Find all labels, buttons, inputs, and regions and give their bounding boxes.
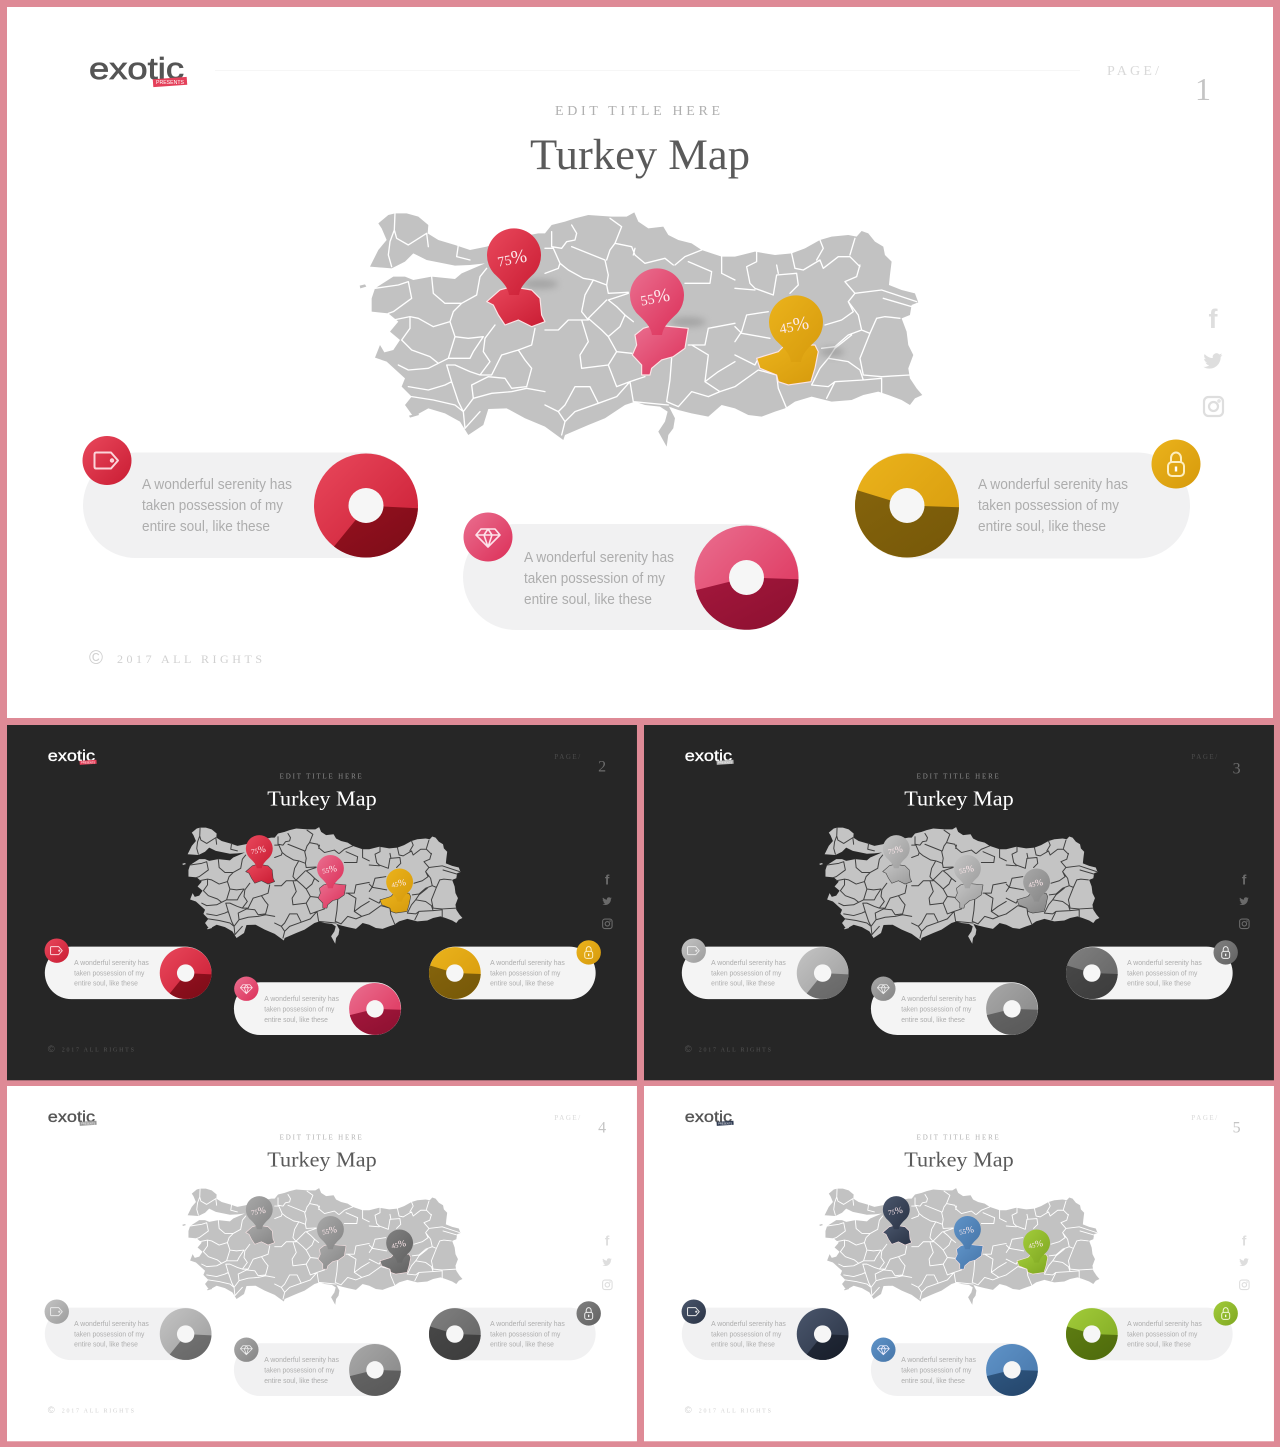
card text: A wonderful serenity has <box>74 958 149 967</box>
card text: taken possession of my <box>711 1329 782 1338</box>
province and pin: 55%: 55% <box>321 864 338 877</box>
card: middle <box>234 1338 401 1396</box>
card: right <box>1066 1301 1238 1360</box>
social icons: f <box>1242 1234 1247 1249</box>
card text: taken possession of my <box>978 497 1119 514</box>
subtitle: EDIT TITLE HERE <box>280 1134 363 1142</box>
card: middle <box>234 977 401 1035</box>
card text: taken possession of my <box>711 968 782 977</box>
card text: taken possession of my <box>901 1366 972 1375</box>
card text: A wonderful serenity has <box>490 958 565 967</box>
donut chart <box>314 454 418 558</box>
page number: 4 <box>598 1119 606 1136</box>
province and pin: 75% <box>487 228 558 327</box>
icon: tag <box>45 938 69 963</box>
card: left <box>45 1299 212 1360</box>
card: left <box>682 938 849 999</box>
icon: tag <box>82 436 132 485</box>
icon: tag <box>682 1299 706 1324</box>
card text <box>264 1355 339 1385</box>
card text: entire soul, like these <box>1127 1340 1191 1349</box>
donut chart <box>349 983 401 1035</box>
title: Turkey Map <box>267 1148 377 1172</box>
logo: PRESENTS <box>81 1122 95 1125</box>
subtitle: EDIT TITLE HERE <box>555 104 723 119</box>
icon: lock <box>1152 440 1200 488</box>
card text: A wonderful serenity has <box>264 994 339 1003</box>
slide 5: light navy, blue and green slide <box>644 1086 1274 1441</box>
card text <box>490 1319 565 1349</box>
footer: © <box>685 1044 692 1055</box>
logo: exotic <box>48 1109 95 1126</box>
footer: © <box>48 1405 55 1416</box>
icon: diamond <box>871 977 896 1001</box>
donut chart <box>160 947 212 999</box>
card text <box>524 549 674 608</box>
donut chart <box>986 983 1038 1035</box>
card text: A wonderful serenity has <box>264 1355 339 1364</box>
social icons <box>602 873 612 929</box>
card text: entire soul, like these <box>490 1340 554 1349</box>
map of Turkey <box>819 1188 1099 1305</box>
card: right <box>855 440 1200 558</box>
card text: taken possession of my <box>1127 1329 1198 1338</box>
footer: 2017 ALL RIGHTS <box>62 1047 135 1053</box>
province and pin: 45% <box>380 868 413 913</box>
province and pin: 55% <box>317 1216 346 1269</box>
page label: PAGE/ <box>1191 753 1219 761</box>
slide 4: light greyscale slide <box>7 1086 637 1441</box>
footer: 2017 ALL RIGHTS <box>699 1047 772 1053</box>
card text <box>978 476 1128 535</box>
card: middle <box>871 1338 1038 1396</box>
card text: A wonderful serenity has <box>1127 958 1202 967</box>
card text <box>264 994 339 1024</box>
province and pin: 55% <box>954 1216 983 1269</box>
card text <box>74 958 149 988</box>
icon: tag <box>45 1299 69 1324</box>
card text: entire soul, like these <box>264 1376 328 1385</box>
province and pin: 55%: 55% <box>321 1225 338 1238</box>
card: left <box>45 938 212 999</box>
card text: entire soul, like these <box>901 1015 965 1024</box>
donut chart <box>349 1344 401 1396</box>
social icons: f <box>605 1234 610 1249</box>
card text <box>711 1319 786 1349</box>
slide 1: large light slide <box>7 7 1273 718</box>
card text: taken possession of my <box>264 1366 335 1375</box>
icon: lock <box>577 940 601 965</box>
card text <box>901 994 976 1024</box>
page label: PAGE/ <box>1107 64 1162 79</box>
card: right <box>429 1301 601 1360</box>
province and pin: 45%: 45% <box>1028 1239 1044 1251</box>
province and pin: 75%: 75% <box>250 845 267 857</box>
card text: A wonderful serenity has <box>490 1319 565 1328</box>
donut chart <box>797 1308 849 1360</box>
card: middle <box>871 977 1038 1035</box>
province and pin: 55% <box>317 855 346 908</box>
province and pin: 45%: 45% <box>391 878 407 890</box>
title: Turkey Map <box>904 787 1014 811</box>
page label: PAGE/ <box>554 753 582 761</box>
footer: © <box>89 648 103 669</box>
icon: lock <box>1214 1301 1238 1326</box>
footer: 2017 ALL RIGHTS <box>117 652 265 666</box>
social icons: f <box>1208 304 1218 334</box>
logo: exotic <box>685 748 732 765</box>
card text: entire soul, like these <box>711 979 775 988</box>
card text: taken possession of my <box>490 968 561 977</box>
card text: taken possession of my <box>901 1005 972 1014</box>
card text: A wonderful serenity has <box>1127 1319 1202 1328</box>
card text: taken possession of my <box>74 1329 145 1338</box>
province and pin: 75%: 75% <box>887 845 904 857</box>
logo: PRESENTS <box>718 1122 732 1125</box>
card text <box>74 1319 149 1349</box>
map of Turkey <box>182 1188 462 1305</box>
slide 3: dark greyscale slide <box>644 725 1274 1080</box>
slide 2: dark colour slide <box>7 725 637 1080</box>
province and pin: 75% <box>883 835 912 884</box>
card text: entire soul, like these <box>711 1340 775 1349</box>
social icons <box>1203 304 1223 416</box>
province and pin: 45%: 45% <box>1028 878 1044 890</box>
social icons <box>1239 1234 1249 1290</box>
donut chart <box>797 947 849 999</box>
donut chart <box>429 947 481 999</box>
donut chart <box>1066 1308 1118 1360</box>
icon: tag <box>682 938 706 963</box>
card text: A wonderful serenity has <box>901 994 976 1003</box>
card text <box>1127 958 1202 988</box>
footer <box>685 1405 772 1416</box>
card text: entire soul, like these <box>1127 979 1191 988</box>
province and pin: 75% <box>246 1196 275 1245</box>
card text: A wonderful serenity has <box>142 476 292 493</box>
footer: © <box>685 1405 692 1416</box>
province and pin: 75% <box>883 1196 912 1245</box>
donut chart <box>694 526 798 630</box>
card: left <box>682 1299 849 1360</box>
social icons <box>602 1234 612 1290</box>
province and pin: 55%: 55% <box>958 1225 975 1238</box>
page number: 2 <box>598 758 606 775</box>
subtitle: EDIT TITLE HERE <box>280 773 363 781</box>
footer <box>685 1044 772 1055</box>
icon: diamond <box>234 977 259 1001</box>
card text: entire soul, like these <box>901 1376 965 1385</box>
map of Turkey <box>819 827 1099 944</box>
page label: PAGE/ <box>554 1114 582 1122</box>
card text <box>490 958 565 988</box>
logo: exotic <box>89 51 184 86</box>
card: left <box>82 436 418 558</box>
donut chart <box>986 1344 1038 1396</box>
card: right <box>429 940 601 999</box>
icon: lock <box>1214 940 1238 965</box>
card text: entire soul, like these <box>264 1015 328 1024</box>
card: middle <box>463 512 799 630</box>
province and pin: 45%: 45% <box>391 1239 407 1251</box>
donut chart <box>429 1308 481 1360</box>
social icons: f <box>1242 873 1247 888</box>
card text: A wonderful serenity has <box>711 1319 786 1328</box>
footer <box>48 1044 135 1055</box>
card text: taken possession of my <box>264 1005 335 1014</box>
card text: taken possession of my <box>490 1329 561 1338</box>
card text <box>901 1355 976 1385</box>
icon: diamond <box>234 1338 259 1362</box>
map of Turkey <box>360 212 922 447</box>
logo: exotic <box>685 1109 732 1126</box>
footer: © <box>48 1044 55 1055</box>
province and pin: 55% <box>954 855 983 908</box>
province and pin: 55%: 55% <box>958 864 975 877</box>
icon: lock <box>577 1301 601 1326</box>
card text <box>1127 1319 1202 1349</box>
province and pin: 45%: 45% <box>778 313 811 339</box>
province and pin: 55% <box>630 268 706 375</box>
footer: 2017 ALL RIGHTS <box>62 1408 135 1414</box>
card text: entire soul, like these <box>524 591 652 608</box>
card text: taken possession of my <box>524 570 665 587</box>
card text: taken possession of my <box>142 497 283 514</box>
card text: A wonderful serenity has <box>524 549 674 566</box>
province and pin: 45% <box>757 295 844 385</box>
card text: entire soul, like these <box>490 979 554 988</box>
card text: taken possession of my <box>74 968 145 977</box>
province and pin: 45% <box>1017 868 1050 913</box>
social icons <box>1239 873 1249 929</box>
province and pin: 45% <box>380 1229 413 1274</box>
footer <box>48 1405 135 1416</box>
map of Turkey <box>182 827 462 944</box>
page number: 1 <box>1195 71 1211 107</box>
card text: A wonderful serenity has <box>978 476 1128 493</box>
donut chart <box>855 454 959 558</box>
footer <box>89 648 265 669</box>
logo: exotic <box>48 748 95 765</box>
logo: PRESENTS <box>81 761 95 764</box>
page label: PAGE/ <box>1191 1114 1219 1122</box>
icon: diamond <box>871 1338 896 1362</box>
card text <box>142 476 292 535</box>
province and pin: 75%: 75% <box>250 1206 267 1218</box>
icon: diamond <box>464 512 512 562</box>
province and pin: 75%: 75% <box>496 246 529 272</box>
card text: entire soul, like these <box>74 979 138 988</box>
card: right <box>1066 940 1238 999</box>
card text: entire soul, like these <box>74 1340 138 1349</box>
card text: A wonderful serenity has <box>711 958 786 967</box>
province and pin: 55%: 55% <box>639 285 672 311</box>
subtitle: EDIT TITLE HERE <box>917 773 1000 781</box>
page number: 3 <box>1233 760 1241 777</box>
card text: entire soul, like these <box>978 518 1106 535</box>
logo: PRESENTS <box>156 80 185 86</box>
title: Turkey Map <box>904 1148 1014 1172</box>
social icons: f <box>605 873 610 888</box>
donut chart <box>160 1308 212 1360</box>
card text: taken possession of my <box>1127 968 1198 977</box>
title: Turkey Map <box>267 787 377 811</box>
province and pin: 45% <box>1017 1229 1050 1274</box>
subtitle: EDIT TITLE HERE <box>917 1134 1000 1142</box>
logo: PRESENTS <box>718 761 732 764</box>
footer: 2017 ALL RIGHTS <box>699 1408 772 1414</box>
card text: A wonderful serenity has <box>74 1319 149 1328</box>
card text: entire soul, like these <box>142 518 270 535</box>
province and pin: 75% <box>246 835 275 884</box>
card text: A wonderful serenity has <box>901 1355 976 1364</box>
donut chart <box>1066 947 1118 999</box>
page number: 5 <box>1233 1119 1241 1136</box>
card text <box>711 958 786 988</box>
title: Turkey Map <box>530 132 750 179</box>
province and pin: 75%: 75% <box>887 1206 904 1218</box>
